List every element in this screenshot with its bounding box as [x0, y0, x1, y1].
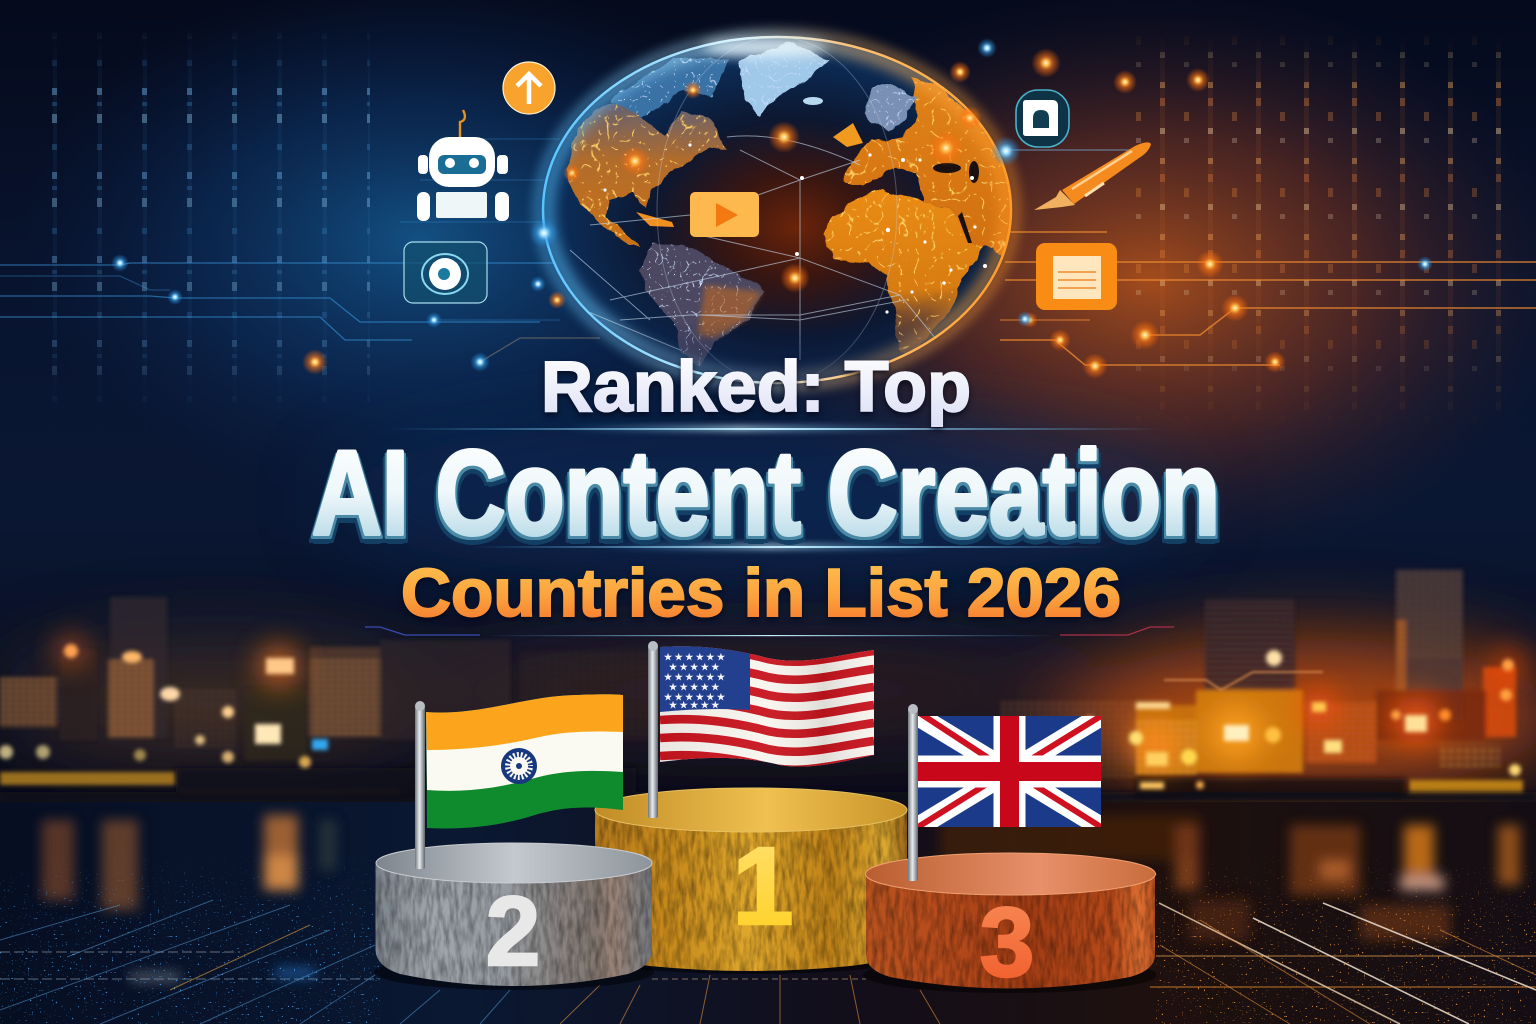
stars: ★ ★ ★ ★ ★ ★: [664, 672, 726, 682]
network lines over globe: [560, 37, 945, 383]
Arctic Canada: [610, 58, 728, 117]
shoreline dark band: [0, 768, 1536, 802]
Africa: [823, 187, 993, 357]
stars: ★ ★ ★ ★ ★: [669, 700, 720, 710]
title rule top: [385, 425, 1165, 432]
flag: United Kingdom with pole: [908, 704, 1101, 881]
Scandinavia: [863, 83, 917, 130]
number 3: 3: [980, 887, 1034, 997]
icon: orange document: [1036, 243, 1117, 310]
title: AI Content Creation: AI Content Creation: [312, 426, 1220, 560]
polar highlight: [703, 39, 827, 57]
globe rim: [543, 37, 1011, 383]
city skyline, blurred: [0, 570, 1536, 802]
rule under subtitle: [365, 627, 1174, 636]
South America orange lights: [698, 285, 762, 338]
podium: bronze third place: [863, 853, 1157, 997]
skyline ambient glow: [10, 640, 1536, 790]
icon: orange pen: [1034, 142, 1151, 210]
left skyline buildings: [0, 597, 650, 794]
globe atmosphere glow: [539, 34, 1015, 386]
title rule middle: [470, 543, 1110, 550]
title: Ranked: Top: Ranked: Top: [541, 348, 971, 427]
number 1: 1: [732, 825, 794, 948]
Britain: [833, 123, 863, 147]
floor sparkle speckle: [0, 850, 1536, 1024]
icon: lock on document: [1016, 90, 1069, 147]
floor reflections: [42, 815, 1520, 981]
South America: [640, 243, 766, 367]
Black Sea and Caspian: [933, 161, 979, 243]
skyline lights: [0, 644, 1521, 789]
Eurasia: [843, 78, 1018, 265]
icon: robot: [417, 110, 509, 221]
continents: [547, 41, 1018, 379]
podium: silver second place: [374, 843, 654, 990]
North America: [565, 100, 727, 247]
digital data rain columns: [45, 30, 1510, 430]
circuit lines left (blue): [0, 139, 600, 362]
stars: [664, 652, 726, 710]
globe with continents: [539, 34, 1018, 386]
flag: India with pole: [415, 690, 630, 869]
icon: camera lens panel: [404, 242, 487, 303]
stars: ★ ★ ★ ★ ★: [669, 662, 720, 672]
inner rim light: [547, 41, 1007, 379]
globe sphere: [543, 37, 1011, 383]
Ashoka chakra: [503, 750, 535, 782]
stars: ★ ★ ★ ★ ★ ★: [664, 652, 726, 662]
podium: gold first place: [595, 788, 907, 974]
icon: video play tile: [690, 192, 759, 237]
right skyline buildings: [1000, 570, 1523, 794]
number 2: 2: [486, 876, 540, 986]
Iceland: [803, 97, 823, 105]
globe lower fade: [543, 37, 1011, 383]
subtitle: Countries in List 2026: Countries in List 2026: [401, 555, 1121, 631]
wet reflective floor with reflections and grid: [0, 802, 1536, 1024]
icon: upload arrow badge: [503, 62, 555, 114]
stars: ★ ★ ★ ★ ★ ★: [664, 692, 726, 702]
stars: ★ ★ ★ ★ ★: [669, 682, 720, 692]
glowing network nodes: [111, 38, 1433, 379]
circuit lines right (orange): [1000, 150, 1536, 365]
Greenland and arctic: [739, 42, 830, 117]
skyline light halos: [57, 637, 1522, 769]
flag: USA with pole: [648, 640, 880, 818]
city lights on continents: [603, 143, 987, 314]
floor grid lines: [0, 900, 1536, 1024]
Caribbean islands: [636, 212, 674, 227]
